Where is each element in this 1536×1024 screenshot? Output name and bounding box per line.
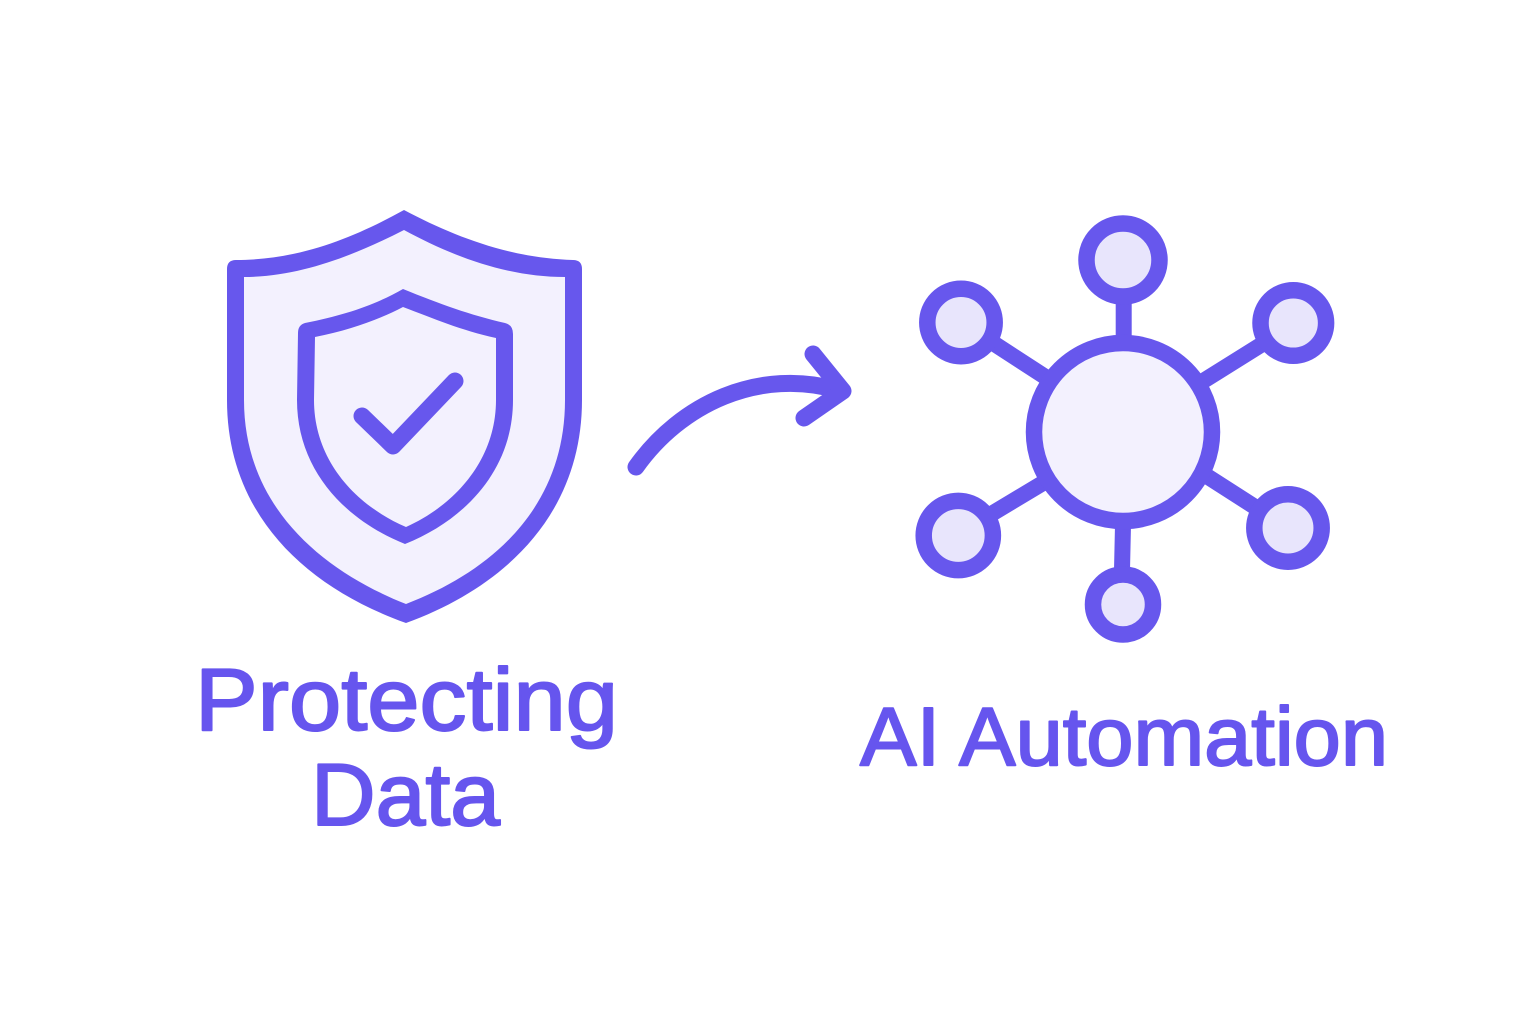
inner shield border bbox=[297, 289, 513, 544]
heading: AI Automation: AI Automation bbox=[860, 690, 1388, 783]
node: bottom bbox=[1093, 574, 1153, 634]
node: lower left bbox=[924, 501, 993, 570]
outer shield border bbox=[227, 210, 582, 623]
label line 1: Protecting bbox=[195, 650, 618, 749]
arrow bbox=[636, 354, 843, 467]
node: lower right bbox=[1254, 494, 1322, 562]
node: upper left bbox=[927, 289, 995, 356]
icon: network hub with six nodes bbox=[924, 224, 1326, 634]
icon: outer shield with inner shield and check mark bbox=[227, 210, 582, 623]
node: upper right bbox=[1260, 290, 1326, 356]
central hub bbox=[1034, 343, 1212, 521]
heading: Protecting Data bbox=[195, 650, 618, 844]
outer shield fill bbox=[244, 230, 565, 604]
connectors bbox=[988, 300, 1264, 570]
label line 2: Data bbox=[311, 745, 500, 844]
check mark bbox=[362, 381, 455, 446]
inner shield fill bbox=[314, 307, 496, 527]
node: top bbox=[1086, 224, 1160, 296]
